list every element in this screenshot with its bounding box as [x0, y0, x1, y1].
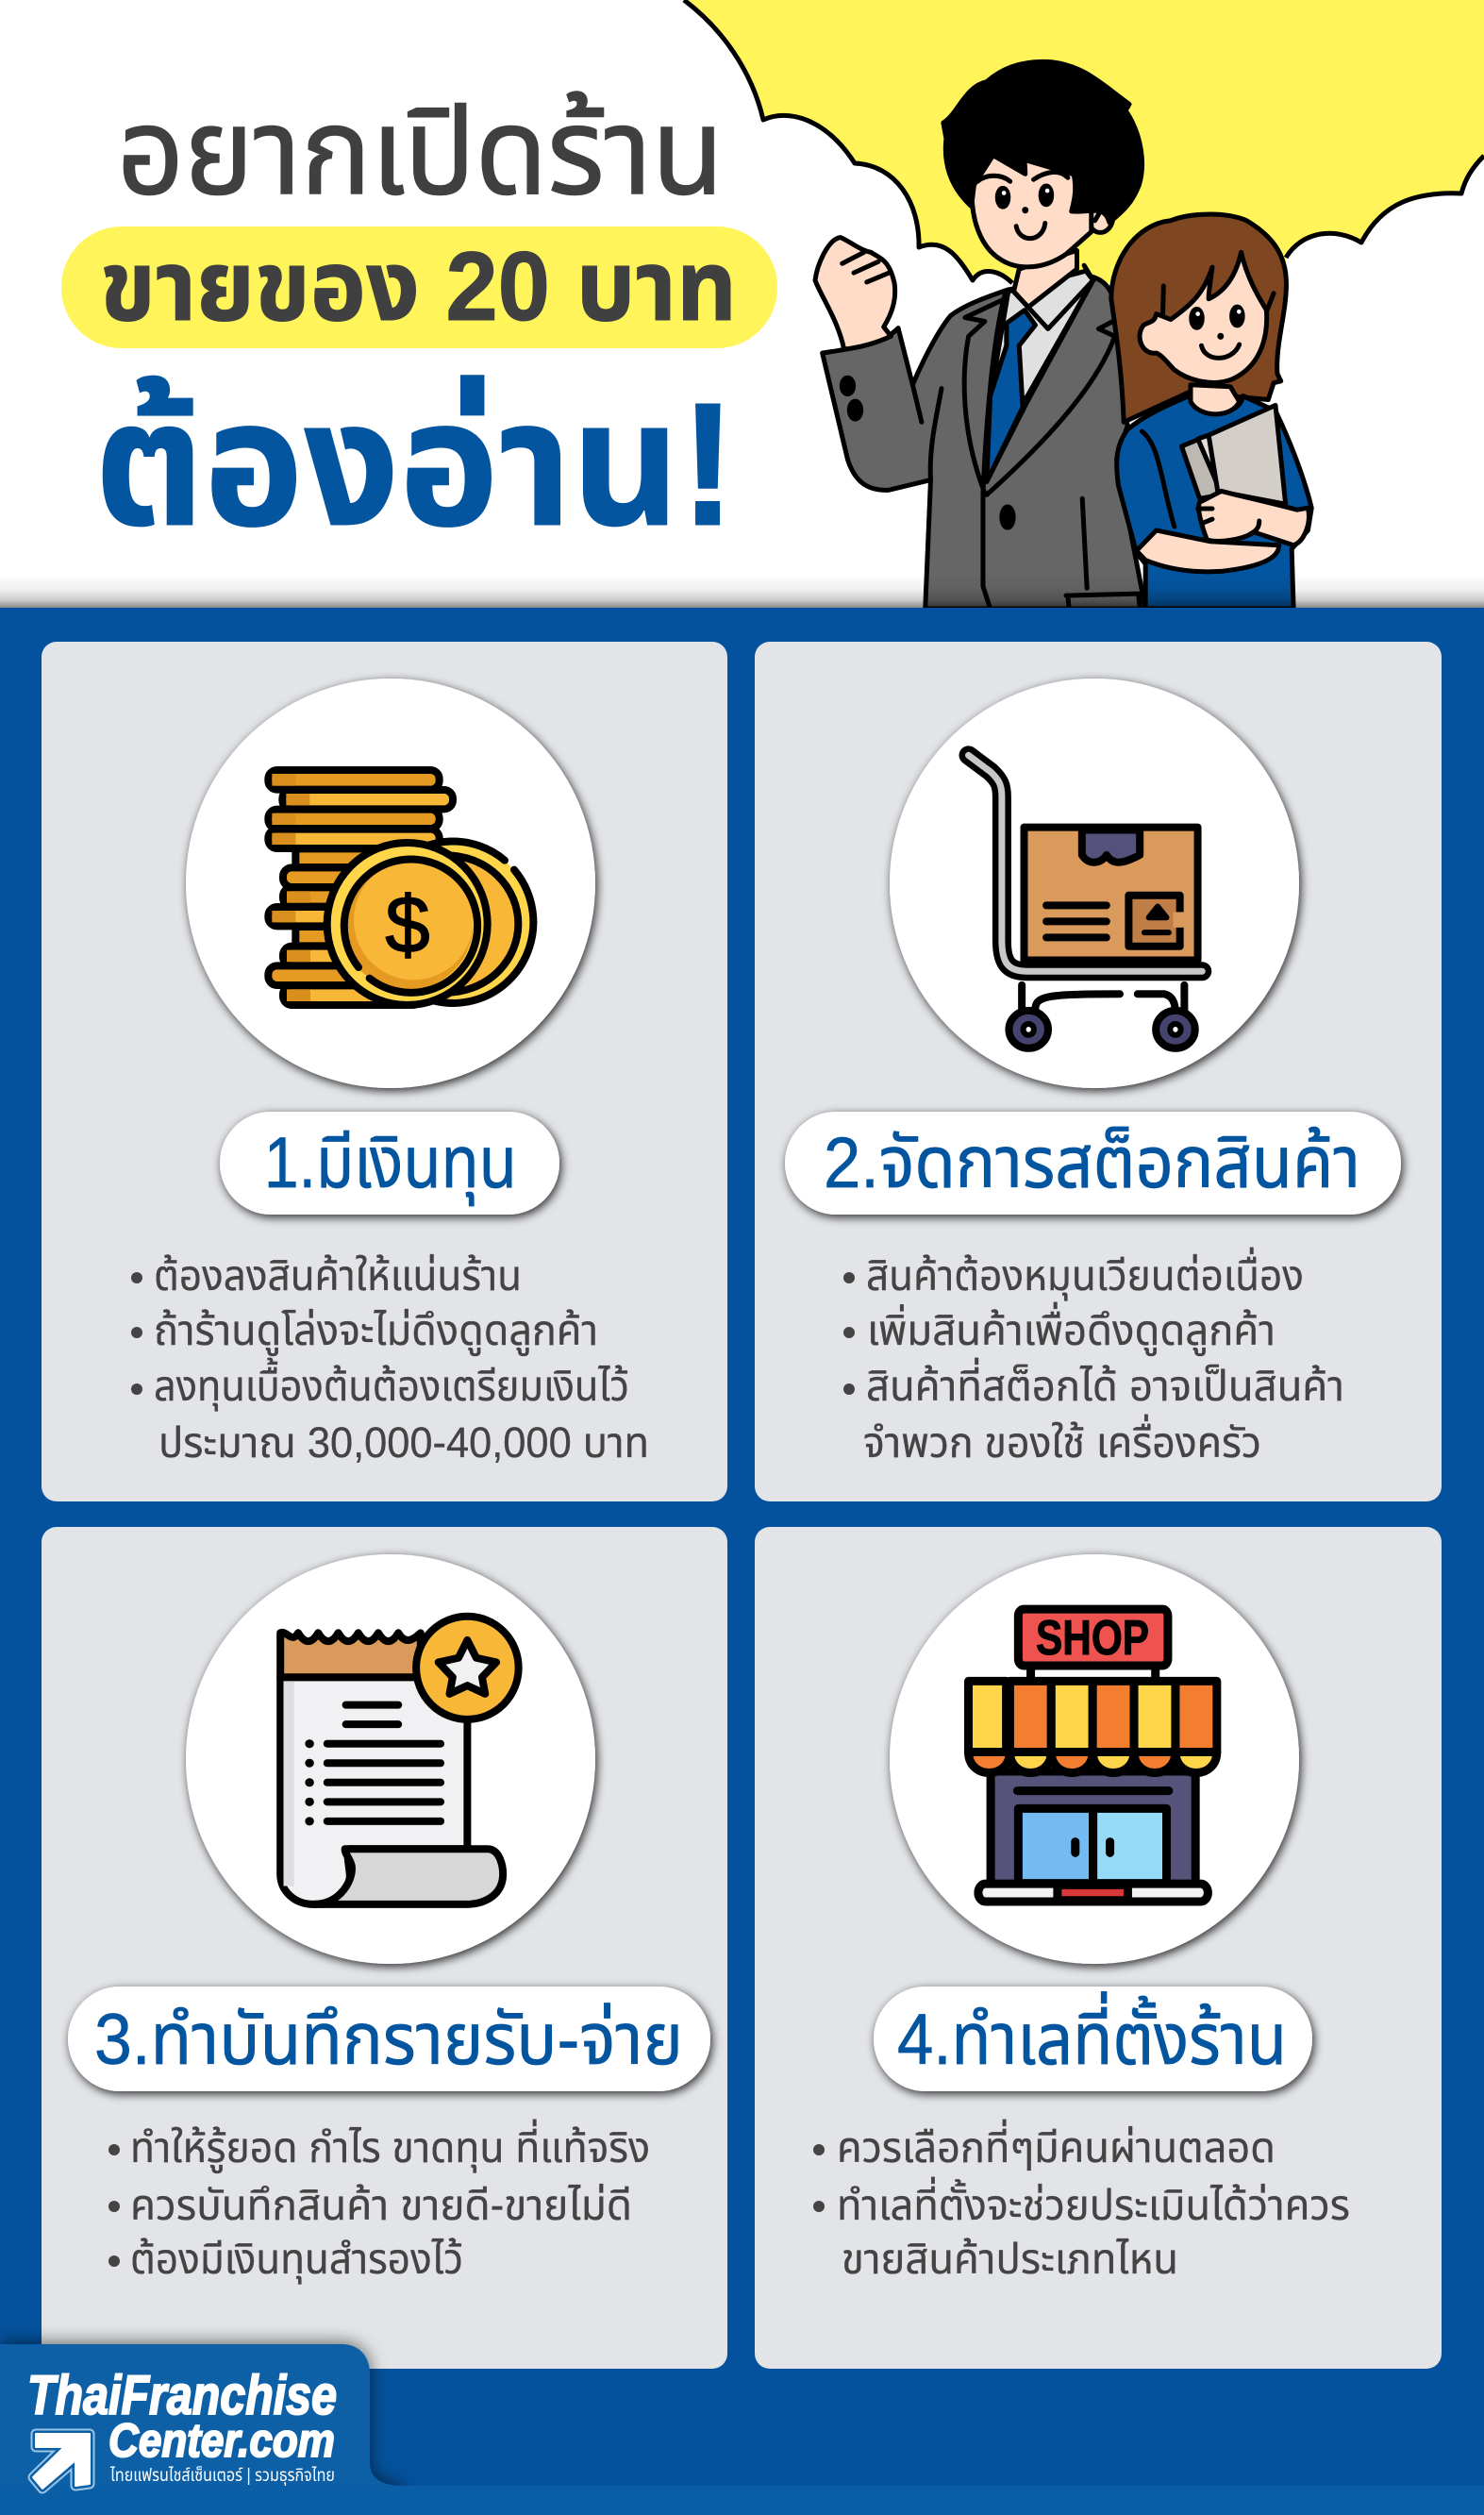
- heading pill: 3.ทำบันทึกรายรับ-จ่าย: [94, 2000, 683, 2080]
- bullet list: เพิ่มสินค้าเพื่อดึงดูดลูกค้า: [867, 1301, 1276, 1356]
- title: [61, 85, 777, 562]
- footer band: [0, 2486, 1484, 2515]
- bullet list: [108, 2119, 650, 2285]
- blue background: [0, 608, 1484, 2515]
- bullet list: ถ้าร้านดูโล่งจะไม่ดึงดูดลูกค้า: [154, 1306, 598, 1356]
- heading pill: 2.จัดการสต็อกสินค้า: [824, 1123, 1360, 1203]
- circle and cart icon: [890, 679, 1299, 1088]
- logo text: Center.com: Center.com: [108, 2414, 335, 2467]
- title line 3: ต้องอ่าน!: [94, 367, 736, 562]
- dollar sign: $: [385, 880, 430, 970]
- heading pill: 4.ทำเลที่ตั้งร้าน: [897, 1991, 1287, 2080]
- shop sign label: SHOP: [1036, 1611, 1149, 1666]
- bullet list: ต้องมีเงินทุนสำรองไว้: [130, 2235, 463, 2285]
- bullet list: [843, 1247, 1344, 1467]
- title line 1: อยากเปิดร้าน: [117, 85, 724, 220]
- bullet list: สินค้าต้องหมุนเวียนต่อเนื่อง: [866, 1247, 1304, 1301]
- logo arrow icon: [33, 2434, 90, 2489]
- heading pill: [220, 1112, 559, 1215]
- bullet list: ทำเลที่ตั้งจะช่วยประเมินได้ว่าควร: [837, 2176, 1350, 2229]
- logo text: ThaiFranchise: ThaiFranchise: [27, 2365, 337, 2426]
- man: [815, 61, 1145, 609]
- bullet list: ประมาณ 30,000-40,000 บาท: [158, 1418, 649, 1467]
- title line 2: ขายของ 20 บาท: [100, 232, 737, 342]
- circle and shop icon: [890, 1554, 1299, 1964]
- bullet list: [813, 2119, 1350, 2283]
- bullet list: ควรบันทึกสินค้า ขายดี-ขายไม่ดี: [130, 2181, 632, 2229]
- panel 2: stock: [755, 642, 1442, 1501]
- circle and coin icon: [186, 679, 595, 1088]
- logo tagline: ไทยแฟรนไชส์เซ็นเตอร์ | รวมธุรกิจไทย: [109, 2466, 335, 2486]
- panel 3: bookkeeping: [42, 1527, 727, 2369]
- bullet list: ขายสินค้าประเภทไหน: [842, 2235, 1178, 2283]
- bullet list: สินค้าที่สต็อกได้ อาจเป็นสินค้า: [866, 1357, 1344, 1410]
- panel 1: capital: [42, 642, 727, 1501]
- highlight pill: [61, 226, 777, 348]
- illustration: man and woman: [815, 61, 1311, 609]
- bullet list: ลงทุนเบื้องต้นต้องเตรียมเงินไว้: [154, 1357, 629, 1412]
- header bottom shadow: [0, 574, 1484, 609]
- circle and receipt icon: [186, 1554, 595, 1964]
- bullet list: จำพวก ของใช้ เครื่องครัว: [863, 1414, 1261, 1467]
- panel 4: location: [755, 1527, 1442, 2369]
- bullet list: ทำให้รู้ยอด กำไร ขาดทุน ที่แท้จริง: [130, 2119, 650, 2173]
- bullet list: ควรเลือกที่ๆมีคนผ่านตลอด: [837, 2119, 1276, 2171]
- yellow cloud background: [684, 0, 1484, 283]
- bullet list: ต้องลงสินค้าให้แน่นร้าน: [154, 1251, 522, 1299]
- bullet list: [131, 1251, 649, 1467]
- logo block: [0, 2344, 472, 2515]
- woman: [1111, 214, 1311, 609]
- heading pill: 1.มีเงินทุน: [264, 1123, 517, 1206]
